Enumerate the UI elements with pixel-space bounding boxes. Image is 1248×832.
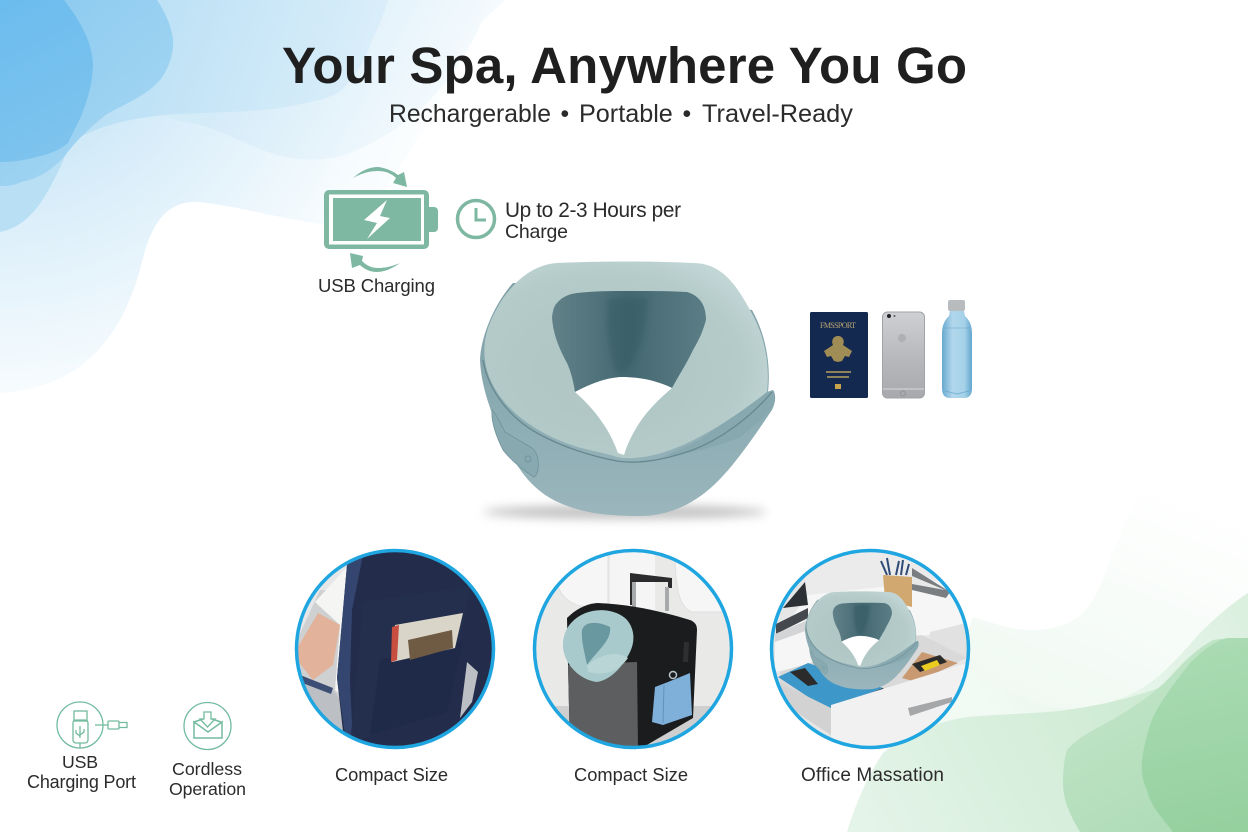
subtitle: Portable <box>579 100 673 128</box>
product: neck massage pillow <box>480 262 775 519</box>
battery life text: Charge <box>505 221 568 243</box>
icon: smartphone <box>882 312 924 398</box>
feature: cordless operation: Operation <box>169 779 246 799</box>
icon: battery with charging arrows <box>324 167 438 272</box>
icon: USB port <box>57 702 127 748</box>
title: Your Spa, Anywhere You Go <box>282 37 967 94</box>
caption: Office Massation: Office Massation <box>801 765 944 786</box>
photo circle: suitcase with pillow <box>533 549 733 749</box>
photo circle: pillow in office drawer <box>770 549 970 749</box>
caption: Compact Size: Compact Size <box>335 764 448 785</box>
icon: water bottle <box>942 300 972 398</box>
icon: passport <box>810 312 868 398</box>
size comparison: passport, phone, bottle <box>810 300 972 398</box>
subtitle: • <box>682 101 691 128</box>
subtitle: Rechargerable <box>389 101 551 128</box>
photo circle: airplane seat pocket <box>295 549 496 749</box>
battery life text: Up to 2-3 Hours per <box>505 199 681 222</box>
icon: passport: FMSSPORT <box>820 321 856 330</box>
feature: cordless operation <box>169 702 246 799</box>
icon: clock <box>458 200 494 238</box>
icon: envelope with arrow <box>184 702 231 750</box>
feature: USB charging port: Charging Port <box>27 772 136 792</box>
subtitle: • <box>560 101 569 128</box>
label: Cordless <box>172 759 242 779</box>
battery life text <box>505 199 681 243</box>
subtitle: Travel-Ready <box>702 100 853 128</box>
label: USB Charging: USB Charging <box>318 275 435 296</box>
label: USB <box>62 752 98 772</box>
caption: Compact Size: Compact Size <box>574 764 688 785</box>
feature: USB charging port <box>27 702 136 792</box>
